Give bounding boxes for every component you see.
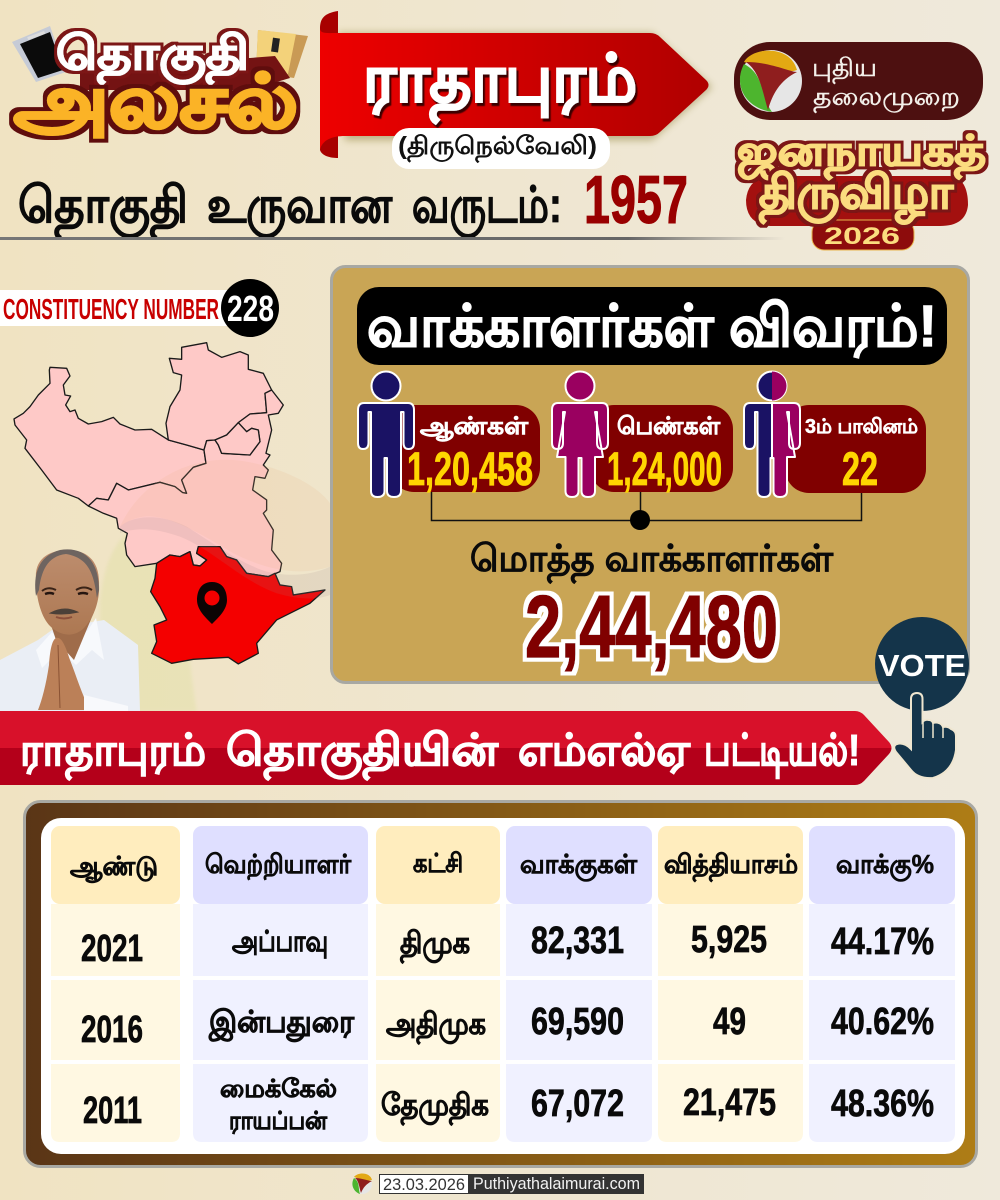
eyes and brows [42, 588, 92, 591]
formed year label: தொகுதி [18, 177, 188, 240]
shirt [0, 620, 140, 711]
row: 2011: மைக்கேல் [220, 1075, 337, 1103]
logo word 2: அலசல் [14, 60, 298, 143]
row: 2011: 48.36% [831, 1083, 934, 1125]
row: 2011: 2011 [83, 1090, 142, 1132]
logo: ஜனநாயகத் திருவிழா 2026: 2026 [824, 223, 900, 250]
table row backgrounds [51, 904, 955, 1142]
portrait of candidate [0, 549, 140, 711]
year: 1957 [584, 162, 688, 238]
constituency name: ராதாபுரம் [363, 41, 637, 125]
stat: women: பெண்கள் [617, 413, 720, 440]
row: 2011 [83, 1075, 934, 1135]
footer: Puthiyathalaimurai.com [473, 1174, 640, 1193]
banner text: ராதாபுரம் [20, 726, 206, 780]
constituency number [0, 279, 279, 337]
row: 2016: 69,590 [531, 1001, 624, 1043]
channel name: புதிய [812, 54, 877, 84]
icon: woman [552, 372, 608, 497]
footer: 23.03.2026 [383, 1175, 465, 1194]
row: 2021: 2021 [81, 928, 143, 970]
table header [51, 826, 955, 904]
header labels: கட்சி [413, 848, 463, 878]
stat: women [552, 372, 733, 497]
row: 2016: 49 [713, 1001, 746, 1043]
row: 2021 [81, 919, 934, 970]
panel: voter details [332, 266, 968, 682]
banner text [20, 726, 860, 780]
row: 2021: அப்பாவு [232, 926, 328, 959]
district pill: (திருநெல்வேலி) [398, 132, 597, 163]
row: 2021: 82,331 [531, 920, 624, 962]
row: 2016: இன்பதுரை [208, 1006, 354, 1042]
logo: தொகுதி அலசல் [12, 26, 308, 143]
region: inner [215, 423, 260, 455]
stat: third gender [744, 372, 926, 497]
banner text: தொகுதியின் [226, 726, 499, 780]
panel: MLA table [24, 802, 976, 1166]
banner text: பட்டியல்! [704, 726, 860, 779]
formed year line [18, 162, 688, 240]
icon: third gender person [744, 372, 800, 497]
neck [50, 612, 94, 660]
formed year label: உருவான [207, 177, 392, 238]
banner text: எம்எல்ஏ [518, 726, 691, 775]
header labels: வெற்றியாளர் [205, 849, 351, 881]
header labels [70, 848, 934, 883]
connector [432, 492, 862, 530]
row: 2021: 44.17% [831, 921, 934, 963]
region: west [14, 367, 206, 506]
date [380, 1174, 468, 1194]
icon: man [358, 372, 414, 497]
title ribbon [320, 11, 712, 158]
icon: vote button with hand [875, 617, 969, 778]
map [14, 343, 325, 664]
logo: ஜனநாயகத் திருவிழா 2026: திருவிழா [759, 166, 954, 224]
header labels: வாக்கு% [836, 849, 934, 882]
website [468, 1174, 644, 1194]
stat: third gender: 22 [842, 442, 878, 495]
constituency number: CONSTITUENCY NUMBER [3, 294, 219, 326]
constituency number: 228 [227, 288, 274, 329]
icon: ballot box [256, 30, 308, 78]
row: 2016: அதிமுக [386, 1008, 486, 1045]
channel name: தலைமுறை [813, 83, 960, 113]
row: 2021: 5,925 [691, 919, 767, 961]
logo: Puthiya Thalaimurai [734, 42, 983, 120]
divider [0, 237, 785, 240]
total label: மொத்த வாக்காளர்கள் [470, 538, 834, 584]
total value: 2,44,480 [525, 577, 778, 676]
header labels: வித்தியாசம் [664, 849, 798, 882]
stat: women: 1,24,000 [607, 442, 722, 495]
formed year label: வருடம்: [412, 177, 562, 238]
logo word 1: தொகுதி [56, 27, 249, 85]
region: Radhapuram highlighted [151, 547, 325, 664]
stat: third gender: 3ம் பாலினம் [805, 416, 918, 438]
footer emblem [352, 1174, 372, 1194]
row: 2016 [81, 1001, 934, 1051]
stat: men: 1,20,458 [407, 442, 533, 495]
stat: men [358, 372, 540, 497]
header labels: ஆண்டு [70, 851, 158, 883]
region: north [166, 343, 272, 450]
row: 2021: திமுக [400, 927, 470, 964]
formed year label [18, 177, 562, 240]
row: 2011: 67,072 [531, 1083, 624, 1125]
icon: map pin [197, 582, 227, 624]
icon: voting machine [12, 26, 66, 82]
row: 2011: 21,475 [683, 1082, 776, 1124]
head [36, 550, 99, 635]
emblem [740, 50, 802, 112]
icon: vote button with hand: VOTE [878, 648, 966, 683]
banner: MLA list [0, 711, 892, 785]
logo: ஜனநாயகத் திருவிழா 2026: ஜனநாயகத் [737, 127, 986, 180]
channel name [812, 54, 960, 113]
map swirl overlay [120, 460, 330, 599]
district pill [392, 128, 610, 169]
row: 2011: ராயப்பன் [229, 1107, 328, 1135]
stat: men: ஆண்கள் [420, 413, 528, 442]
region: central [88, 390, 283, 577]
row: 2016: 40.62% [831, 1001, 934, 1043]
footer [352, 1174, 644, 1194]
background swirl [100, 530, 197, 712]
hair [35, 549, 99, 598]
logo backdrop [80, 56, 290, 90]
pocket [84, 695, 128, 711]
moustache [51, 609, 77, 614]
panel heading: வாக்காளர்கள் விவரம்! [367, 294, 937, 359]
row: 2011: தேமுதிக [381, 1089, 489, 1126]
row: 2016: 2016 [81, 1009, 143, 1051]
folded hands [38, 638, 90, 710]
header labels: வாக்குகள் [520, 849, 638, 882]
logo: ஜனநாயகத் திருவிழா 2026 [737, 127, 986, 250]
